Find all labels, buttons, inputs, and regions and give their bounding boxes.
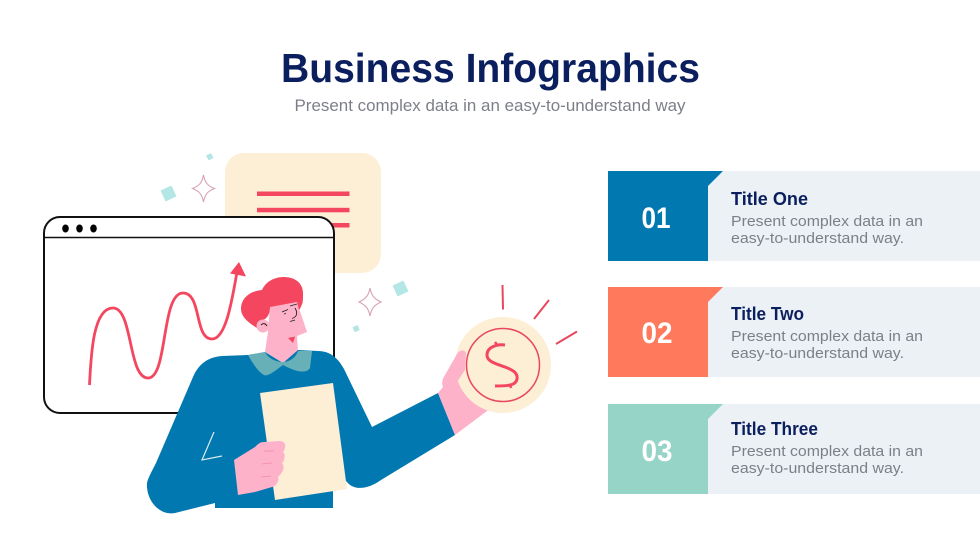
sleeve mark [202, 432, 222, 460]
paper [260, 383, 347, 500]
card 2: Title Two [731, 304, 804, 324]
card 2: 02 [642, 317, 672, 350]
line chart arrow [90, 262, 246, 385]
neck and face [265, 302, 307, 363]
card 1: Present complex data in an [731, 213, 923, 230]
coin rays [502, 285, 577, 344]
illustration: person with chart and coin [44, 153, 577, 513]
card 3: easy-to-understand way. [731, 460, 904, 477]
card 2: easy-to-understand way. [731, 345, 904, 362]
title: Business Infographics [281, 45, 700, 91]
card 3: Title Three [731, 419, 818, 439]
face details [261, 304, 297, 326]
wrist [438, 360, 495, 435]
card 3: Present complex data in an [731, 443, 923, 460]
left hand [234, 441, 285, 495]
card 1: 01 [642, 202, 670, 235]
thumb [442, 350, 466, 387]
card 1: easy-to-understand way. [731, 230, 904, 247]
card 1 [608, 171, 980, 261]
note card [225, 153, 381, 273]
subtitle: Present complex data in an easy-to-understand way [294, 96, 686, 115]
decorative sparkles [161, 153, 408, 332]
coin [442, 285, 577, 413]
hair [241, 277, 303, 328]
person [147, 277, 495, 513]
card 2 [608, 287, 980, 377]
ear [256, 320, 270, 332]
card 3: 03 [642, 435, 672, 468]
card 3 [608, 404, 980, 494]
card 2: Present complex data in an [731, 328, 923, 345]
sweater [147, 350, 455, 513]
browser window [44, 217, 334, 413]
card 1: Title One [731, 189, 808, 209]
collar [248, 351, 312, 375]
